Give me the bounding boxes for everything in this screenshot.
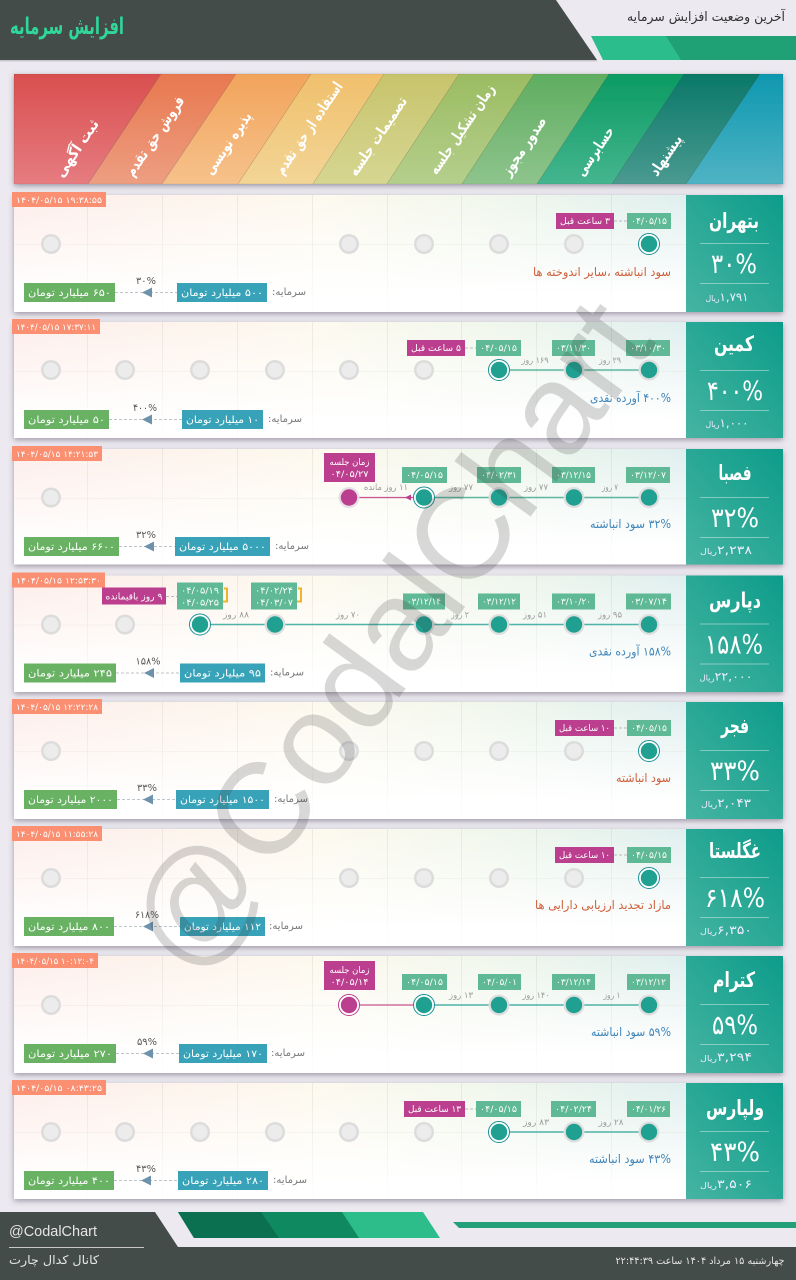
timestamp bbox=[12, 1080, 106, 1095]
timeline: ۸۳ روز bbox=[522, 1118, 549, 1128]
timeline bbox=[41, 582, 671, 635]
capital row: ۵۰ میلیارد تومان bbox=[28, 415, 105, 426]
capital row: سرمایه: bbox=[271, 1048, 305, 1059]
description: سود انباشته bbox=[616, 771, 671, 786]
watermark: @CodalChart bbox=[97, 273, 680, 998]
stage labels: صدور مجوز bbox=[497, 113, 550, 180]
card: بتهران bbox=[12, 192, 783, 312]
timeline: ۱۰ ساعت قبل bbox=[559, 724, 610, 734]
capital row: سرمایه: bbox=[269, 921, 303, 932]
timeline: ۰۳/۱۲/۰۷ bbox=[630, 471, 666, 481]
card: غگلستا bbox=[12, 826, 783, 946]
timeline: ۱۳ روز bbox=[448, 991, 473, 1001]
timeline: ۲ روز bbox=[450, 610, 469, 620]
timestamp: ۱۴۰۴/۰۵/۱۵ ۱۱:۵۵:۲۸ bbox=[16, 830, 98, 840]
company panel: کترام bbox=[713, 968, 756, 992]
stage labels: پیشنهاد bbox=[646, 131, 687, 180]
timeline: ۰۳/۱۲/۱۴ bbox=[556, 978, 591, 988]
company panel: کمین bbox=[714, 332, 755, 356]
capital row: ۳۳% bbox=[137, 783, 157, 794]
timeline bbox=[41, 453, 670, 508]
capital row bbox=[24, 276, 306, 302]
timeline: ۰۴/۰۵/۱۵ bbox=[480, 1105, 517, 1115]
description: ۱۵۸% آورده نقدی bbox=[589, 644, 671, 660]
card: فصبا bbox=[12, 446, 783, 566]
timeline: ۰۳/۱۲/۱۵ bbox=[556, 471, 591, 481]
process stages banner bbox=[14, 74, 783, 184]
timeline: ۰۴/۰۵/۲۵ bbox=[181, 598, 219, 608]
card: دپارس bbox=[12, 572, 783, 692]
timeline: ۰۳/۱۲/۱۲ bbox=[631, 978, 666, 988]
company panel: ۳۳% bbox=[710, 756, 760, 787]
card: کمین bbox=[12, 319, 783, 439]
description: سود انباشته ،سایر اندوخته ها bbox=[533, 265, 671, 280]
card: فجر bbox=[12, 699, 783, 819]
company panel: دپارس bbox=[709, 588, 761, 612]
stage labels: فروش حق تقدم bbox=[121, 93, 188, 180]
stage labels: تصمیمات جلسه bbox=[345, 93, 411, 179]
capital row: ۱۷۰ میلیارد تومان bbox=[183, 1049, 263, 1060]
capital row bbox=[24, 1164, 307, 1190]
header bbox=[0, 0, 796, 62]
company panel: فصبا bbox=[718, 461, 752, 485]
capital row: ۱۵۸% bbox=[136, 656, 160, 668]
timestamp: ۱۴۰۴/۰۵/۱۵ ۱۷:۳۷:۱۱ bbox=[16, 323, 96, 333]
title: افزایش سرمایه bbox=[10, 14, 124, 40]
capital row bbox=[24, 656, 304, 682]
timestamp bbox=[12, 192, 106, 207]
timeline: ۱۳ ساعت قبل bbox=[408, 1105, 461, 1115]
company panel bbox=[686, 956, 783, 1073]
timeline: ۱ روز bbox=[603, 991, 620, 1001]
timestamp bbox=[12, 699, 102, 714]
timeline: ۰۳/۱۰/۲۰ bbox=[556, 598, 591, 608]
company panel: ۶,۳۵۰ریال bbox=[700, 923, 752, 937]
timeline: ۰۴/۰۲/۲۴ bbox=[555, 1105, 592, 1115]
company panel: بتهران bbox=[709, 209, 759, 233]
timeline: ۱۴۰ روز bbox=[522, 991, 550, 1001]
capital row: سرمایه: bbox=[268, 414, 302, 425]
timeline: ۱۶۹ روز bbox=[521, 356, 549, 366]
timeline: ۲۹ روز bbox=[598, 356, 621, 366]
company panel bbox=[686, 1083, 783, 1199]
capital row bbox=[24, 910, 303, 936]
timestamp bbox=[12, 826, 102, 841]
company panel: ولپارس bbox=[706, 1096, 764, 1120]
timeline: ۷ روز bbox=[601, 483, 618, 493]
capital row: ۱۵۰۰ میلیارد تومان bbox=[180, 795, 265, 806]
capital row: ۱۰ میلیارد تومان bbox=[186, 415, 259, 426]
timeline: ۷۷ روز bbox=[448, 483, 473, 493]
timeline bbox=[41, 1101, 670, 1142]
timeline: زمان جلسه bbox=[330, 966, 370, 976]
timeline: ۰۴/۰۱/۲۶ bbox=[631, 1105, 666, 1115]
timeline: ۰۴/۰۵/۱۴ bbox=[330, 978, 369, 988]
capital row bbox=[24, 403, 302, 429]
timestamp: ۱۴۰۴/۰۵/۱۵ ۱۲:۵۳:۳۰ bbox=[16, 576, 101, 586]
capital row: ۴۰۰% bbox=[133, 403, 157, 414]
timeline: زمان جلسه bbox=[330, 458, 370, 468]
company panel bbox=[686, 195, 783, 312]
description: ۵۹% سود انباشته bbox=[591, 1025, 671, 1040]
capital row: ۳۰% bbox=[136, 276, 156, 287]
timeline: ۰۴/۰۵/۰۱ bbox=[482, 978, 517, 988]
capital row: ۲۴۵ میلیارد تومان bbox=[28, 668, 112, 680]
stage labels: حسابرسی bbox=[572, 123, 618, 179]
capital row: سرمایه: bbox=[272, 287, 306, 298]
channel handle: @CodalChart bbox=[9, 1223, 98, 1240]
green band bbox=[591, 36, 796, 60]
company panel: ۴۰۰% bbox=[707, 376, 763, 407]
description: ۴۳% سود انباشته bbox=[589, 1152, 671, 1167]
capital row: سرمایه: bbox=[273, 1175, 307, 1186]
company panel: ۴۳% bbox=[710, 1137, 760, 1168]
timeline bbox=[41, 340, 670, 380]
description: ۳۲% سود انباشته bbox=[590, 517, 671, 532]
capital row: ۲۰۰۰ میلیارد تومان bbox=[28, 795, 113, 806]
company panel bbox=[686, 576, 783, 692]
capital row: ۲۸۰ میلیارد تومان bbox=[182, 1176, 264, 1187]
card: ولپارس bbox=[12, 1080, 783, 1200]
timeline: ۰۳/۱۰/۳۰ bbox=[630, 344, 666, 354]
capital row: ۵۰۰۰ میلیارد تومان bbox=[179, 542, 266, 553]
company panel: ۶۱۸% bbox=[705, 883, 765, 914]
capital row bbox=[24, 530, 309, 556]
capital row: ۶۵۰ میلیارد تومان bbox=[28, 288, 111, 299]
timeline: ۰۴/۰۵/۱۵ bbox=[406, 978, 443, 988]
timeline: ۰۴/۰۵/۱۵ bbox=[631, 851, 667, 861]
subtitle: آخرین وضعیت افزایش سرمایه bbox=[627, 8, 786, 25]
date line: چهارشنبه ۱۵ مرداد ۱۴۰۴ ساعت ۲۲:۴۴:۳۹ bbox=[616, 1256, 784, 1267]
timeline: ۷۰ روز bbox=[335, 610, 360, 620]
company panel: ۲,۰۴۳ریال bbox=[701, 796, 752, 810]
footer green bar bbox=[453, 1222, 796, 1228]
stage labels: ثبت آگهی bbox=[51, 116, 103, 181]
timeline: ۷۷ روز bbox=[523, 483, 548, 493]
timeline: ۹۵ روز bbox=[597, 610, 622, 620]
stage labels: پذیره نویسی bbox=[200, 108, 256, 179]
timeline: ۰۴/۰۲/۳۱ bbox=[481, 471, 517, 481]
timeline: ۵۱ روز bbox=[522, 610, 547, 620]
capital row: ۴۰۰ میلیارد تومان bbox=[28, 1176, 110, 1187]
company panel: ۱۵۸% bbox=[705, 630, 763, 660]
timeline: ۰۴/۰۵/۱۹ bbox=[181, 586, 219, 596]
timeline bbox=[41, 213, 671, 254]
timeline: ۰۳/۰۷/۱۴ bbox=[630, 598, 667, 608]
timeline: ۰۳/۱۱/۳۰ bbox=[556, 344, 591, 354]
description: ۴۰۰% آورده نقدی bbox=[590, 390, 671, 406]
company panel: ۳۲% bbox=[711, 503, 759, 534]
capital row bbox=[24, 783, 308, 809]
timestamp bbox=[12, 319, 100, 334]
timeline bbox=[41, 847, 671, 888]
timeline: ۱۰ ساعت قبل bbox=[559, 851, 610, 861]
timeline: ۳ ساعت قبل bbox=[560, 217, 610, 227]
timeline: ۰۴/۰۵/۲۷ bbox=[330, 470, 369, 480]
timestamp: ۱۴۰۴/۰۵/۱۵ ۱۹:۳۸:۵۵ bbox=[16, 196, 102, 206]
capital row: ۲۷۰ میلیارد تومان bbox=[28, 1049, 112, 1060]
timeline: ۲۸ روز bbox=[597, 1118, 624, 1128]
timeline: ۹ روز باقیمانده bbox=[106, 592, 163, 602]
stage labels bbox=[51, 78, 687, 181]
timestamp bbox=[12, 446, 102, 461]
footer bbox=[0, 1212, 796, 1280]
timeline: ۰۳/۱۲/۱۴ bbox=[407, 598, 441, 608]
capital row: ۹۵ میلیارد تومان bbox=[184, 668, 261, 680]
timeline: ۵ ساعت قبل bbox=[411, 344, 461, 354]
footer green stripes bbox=[178, 1212, 440, 1238]
capital row: سرمایه: bbox=[275, 541, 309, 552]
timeline: ۰۴/۰۵/۱۵ bbox=[406, 471, 443, 481]
company panel bbox=[686, 829, 783, 946]
timeline: ۰۴/۰۵/۱۵ bbox=[631, 724, 667, 734]
capital row: ۳۲% bbox=[136, 530, 156, 541]
capital row: ۵۹% bbox=[137, 1037, 157, 1048]
capital row: سرمایه: bbox=[270, 668, 304, 678]
company panel bbox=[686, 322, 783, 438]
capital row: ۵۰۰ میلیارد تومان bbox=[181, 288, 263, 299]
company panel: ۱,۷۹۱ریال bbox=[706, 290, 748, 304]
company panel: ۳,۵۰۶ریال bbox=[700, 1177, 752, 1191]
company panel: ۵۹% bbox=[712, 1010, 758, 1041]
company panel: غگلستا bbox=[709, 838, 761, 863]
capital row: سرمایه: bbox=[274, 794, 308, 805]
timestamp bbox=[12, 953, 98, 968]
stage labels: زمان تشکیل جلسه bbox=[425, 81, 499, 178]
timestamp: ۱۴۰۴/۰۵/۱۵ ۰۸:۴۳:۲۵ bbox=[16, 1084, 102, 1094]
timeline: ۰۴/۰۲/۲۴ bbox=[255, 586, 293, 596]
timestamp: ۱۴۰۴/۰۵/۱۵ ۱۴:۲۱:۵۳ bbox=[16, 450, 98, 460]
timeline: ۰۳/۱۲/۱۲ bbox=[482, 598, 516, 608]
timeline: ۰۴/۰۵/۱۵ bbox=[631, 217, 667, 227]
company panel: ۲,۲۳۸ریال bbox=[700, 543, 753, 557]
timestamp: ۱۴۰۴/۰۵/۱۵ ۱۲:۲۲:۲۸ bbox=[16, 703, 98, 713]
timeline: ۰۴/۰۵/۱۵ bbox=[480, 344, 517, 354]
capital row: ۸۰۰ میلیارد تومان bbox=[28, 922, 110, 933]
capital row: ۶۶۰۰ میلیارد تومان bbox=[28, 542, 115, 553]
timeline: ۱۱ روز مانده bbox=[364, 483, 408, 493]
capital row: ۱۱۲ میلیارد تومان bbox=[184, 922, 261, 933]
card: کترام bbox=[12, 953, 783, 1073]
capital row: ۴۳% bbox=[136, 1164, 156, 1175]
timestamp: ۱۴۰۴/۰۵/۱۵ ۱۰:۱۲:۰۴ bbox=[16, 957, 94, 967]
company panel: ۱,۰۰۰ریال bbox=[706, 416, 748, 430]
company panel bbox=[686, 449, 783, 564]
company panel: فجر bbox=[720, 714, 749, 738]
timestamp bbox=[12, 572, 105, 588]
capital row bbox=[24, 1037, 305, 1063]
company panel: ۳۰% bbox=[711, 249, 757, 280]
timeline: ۸۸ روز bbox=[222, 610, 249, 620]
timeline bbox=[41, 961, 670, 1016]
company panel bbox=[686, 702, 783, 819]
company panel: ۳,۲۹۴ریال bbox=[700, 1050, 752, 1064]
stage labels: استفاده از حق تقدم bbox=[271, 78, 347, 178]
description: مازاد تجدید ارزیابی دارایی ها bbox=[535, 898, 671, 913]
capital row: ۶۱۸% bbox=[135, 910, 159, 921]
company panel: ۲۲,۰۰۰ریال bbox=[700, 670, 752, 684]
channel name: کانال کدال چارت bbox=[9, 1253, 99, 1268]
timeline: ۰۴/۰۳/۰۷ bbox=[255, 598, 293, 608]
timeline bbox=[41, 720, 671, 762]
